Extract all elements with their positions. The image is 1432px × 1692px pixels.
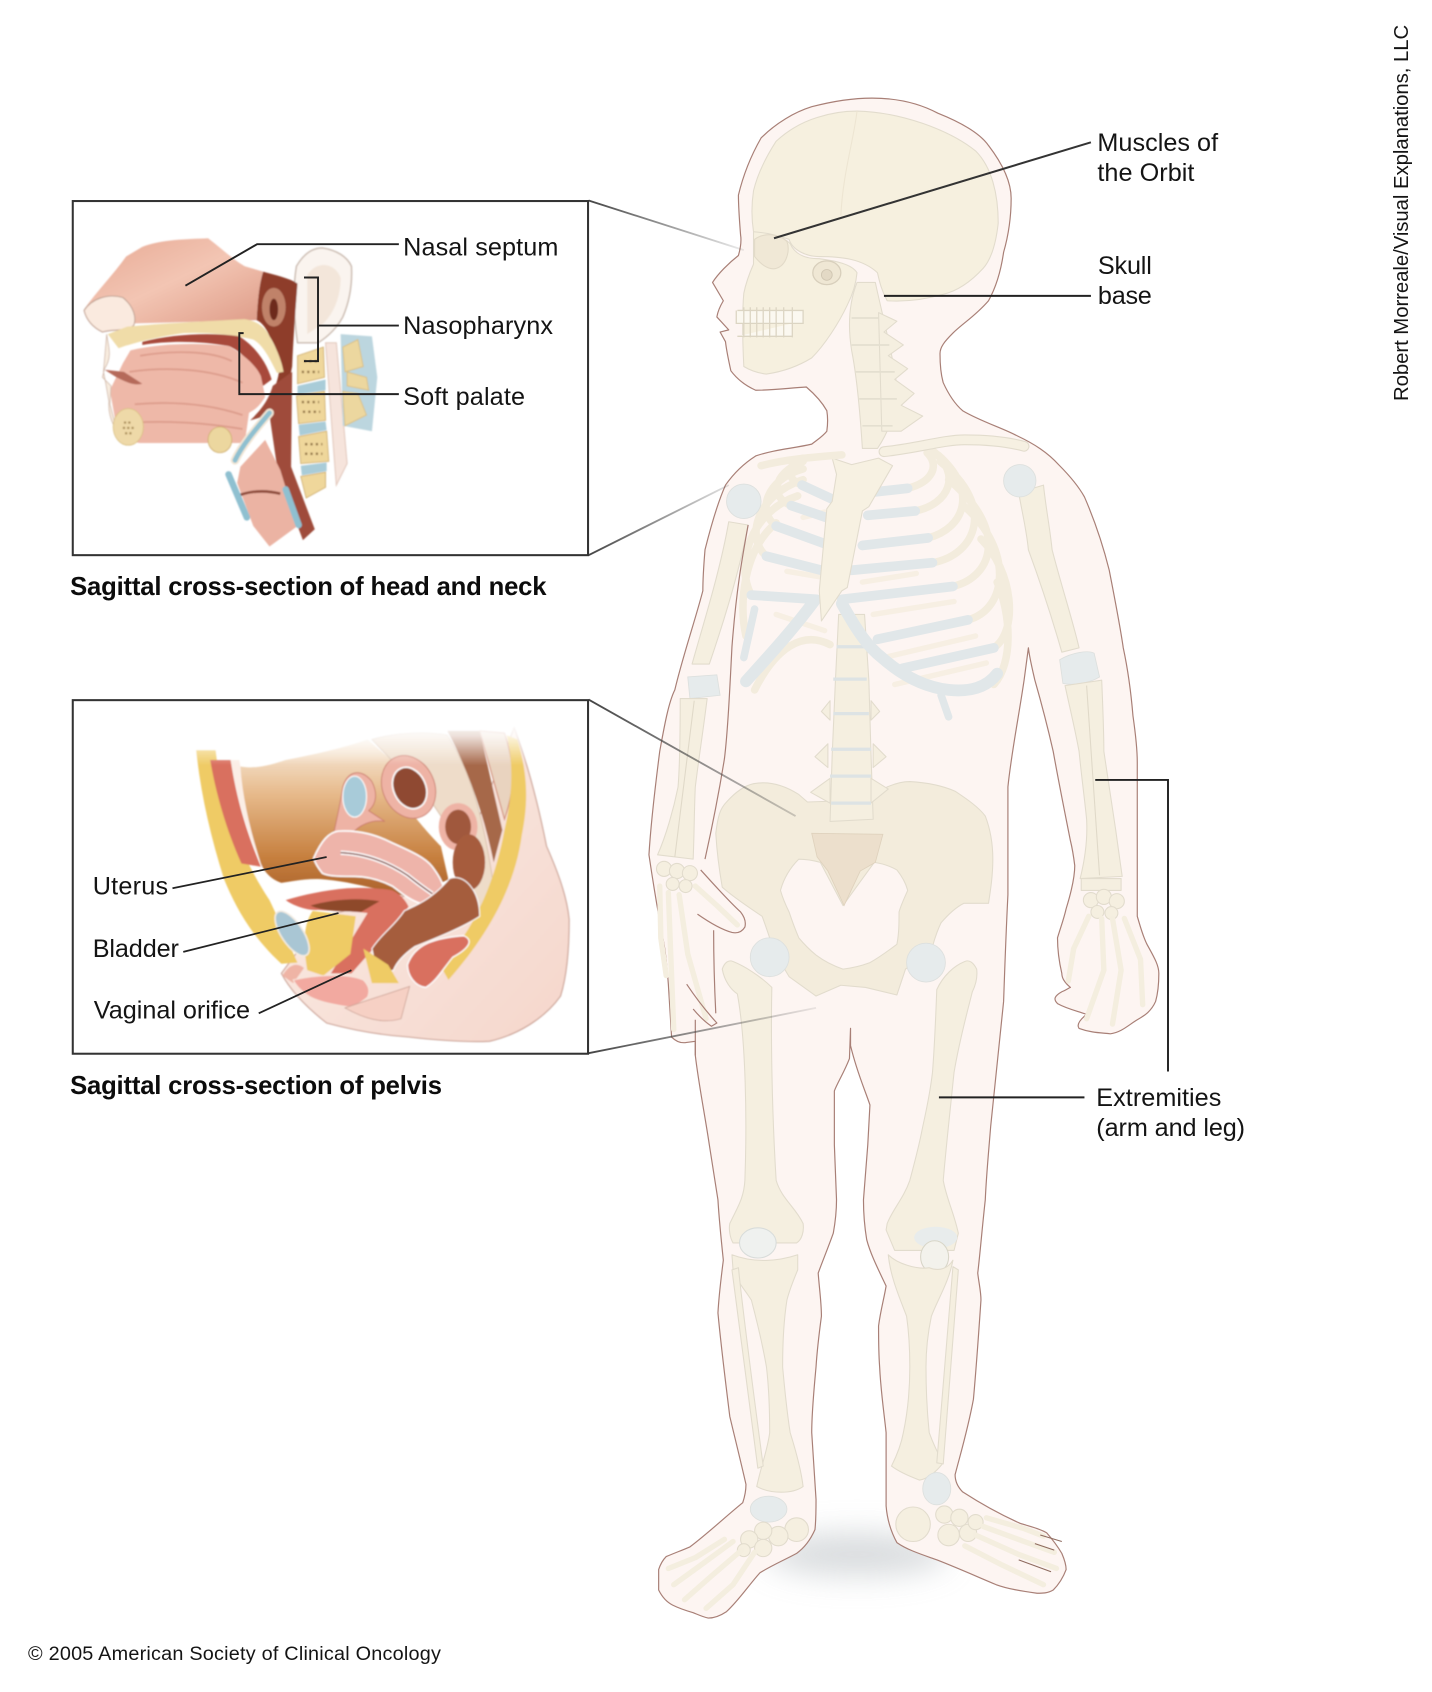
body silhouette xyxy=(649,98,1159,1618)
skull xyxy=(736,111,998,374)
hand and torso contour lines xyxy=(687,525,748,1055)
right foot bones xyxy=(896,1506,1062,1585)
nasal septum callout: Nasal septum xyxy=(403,233,558,261)
uterus callout xyxy=(93,857,327,901)
callout: skull base xyxy=(884,252,1152,310)
head and neck anatomy illustration xyxy=(84,238,377,547)
sternum xyxy=(819,458,893,621)
right leg bones xyxy=(886,943,977,1505)
pelvis xyxy=(716,782,993,996)
panel: head and neck inset xyxy=(73,201,588,555)
vaginal orifice callout xyxy=(94,970,351,1025)
callout: muscles of the orbit: the Orbit xyxy=(1097,159,1194,187)
bladder callout xyxy=(93,913,338,963)
callout: muscles of the orbit: Muscles of xyxy=(1097,129,1219,157)
connector: head inset to body xyxy=(589,201,744,555)
artist credit: Robert Morreale/Visual Explanations, LLC xyxy=(1391,25,1413,401)
rib cage xyxy=(743,451,1009,717)
pelvis anatomy illustration xyxy=(189,720,569,1042)
caption: head and neck: Sagittal cross-section of head and neck xyxy=(70,573,547,601)
orbit xyxy=(755,235,788,269)
left foot bones xyxy=(668,1518,808,1608)
soft palate callout: Soft palate xyxy=(403,383,525,411)
child body with skeleton xyxy=(649,98,1159,1618)
soft palate callout xyxy=(239,333,525,411)
nasopharynx callout xyxy=(304,277,553,361)
panel: pelvis inset xyxy=(73,700,588,1054)
teeth xyxy=(736,307,803,337)
nasopharynx callout: Nasopharynx xyxy=(403,312,553,340)
caption: pelvis: Sagittal cross-section of pelvis xyxy=(70,1072,442,1100)
callout: extremities: (arm and leg) xyxy=(1096,1114,1245,1142)
callout: extremities: Extremities xyxy=(1096,1084,1221,1112)
left leg bones xyxy=(722,938,803,1522)
nasal septum callout xyxy=(185,233,558,286)
callout: extremities xyxy=(939,780,1245,1142)
sacrum xyxy=(812,833,883,906)
vaginal orifice callout: Vaginal orifice xyxy=(94,997,250,1025)
clavicles xyxy=(761,440,1024,466)
bladder callout: Bladder xyxy=(93,935,179,963)
callout: skull base: Skull xyxy=(1098,252,1152,280)
uterus callout: Uterus xyxy=(93,873,168,901)
connector: pelvis inset to body xyxy=(589,700,816,1053)
ground shadow xyxy=(765,1533,949,1576)
cervical spine xyxy=(849,282,923,448)
callout: skull base: base xyxy=(1098,282,1152,310)
right arm bones xyxy=(1004,465,1143,1024)
copyright: © 2005 American Society of Clinical Oncology xyxy=(28,1643,441,1665)
lumbar and thoracic spine xyxy=(811,614,888,821)
left arm bones xyxy=(656,484,761,1029)
callout: muscles of the orbit xyxy=(774,129,1219,238)
